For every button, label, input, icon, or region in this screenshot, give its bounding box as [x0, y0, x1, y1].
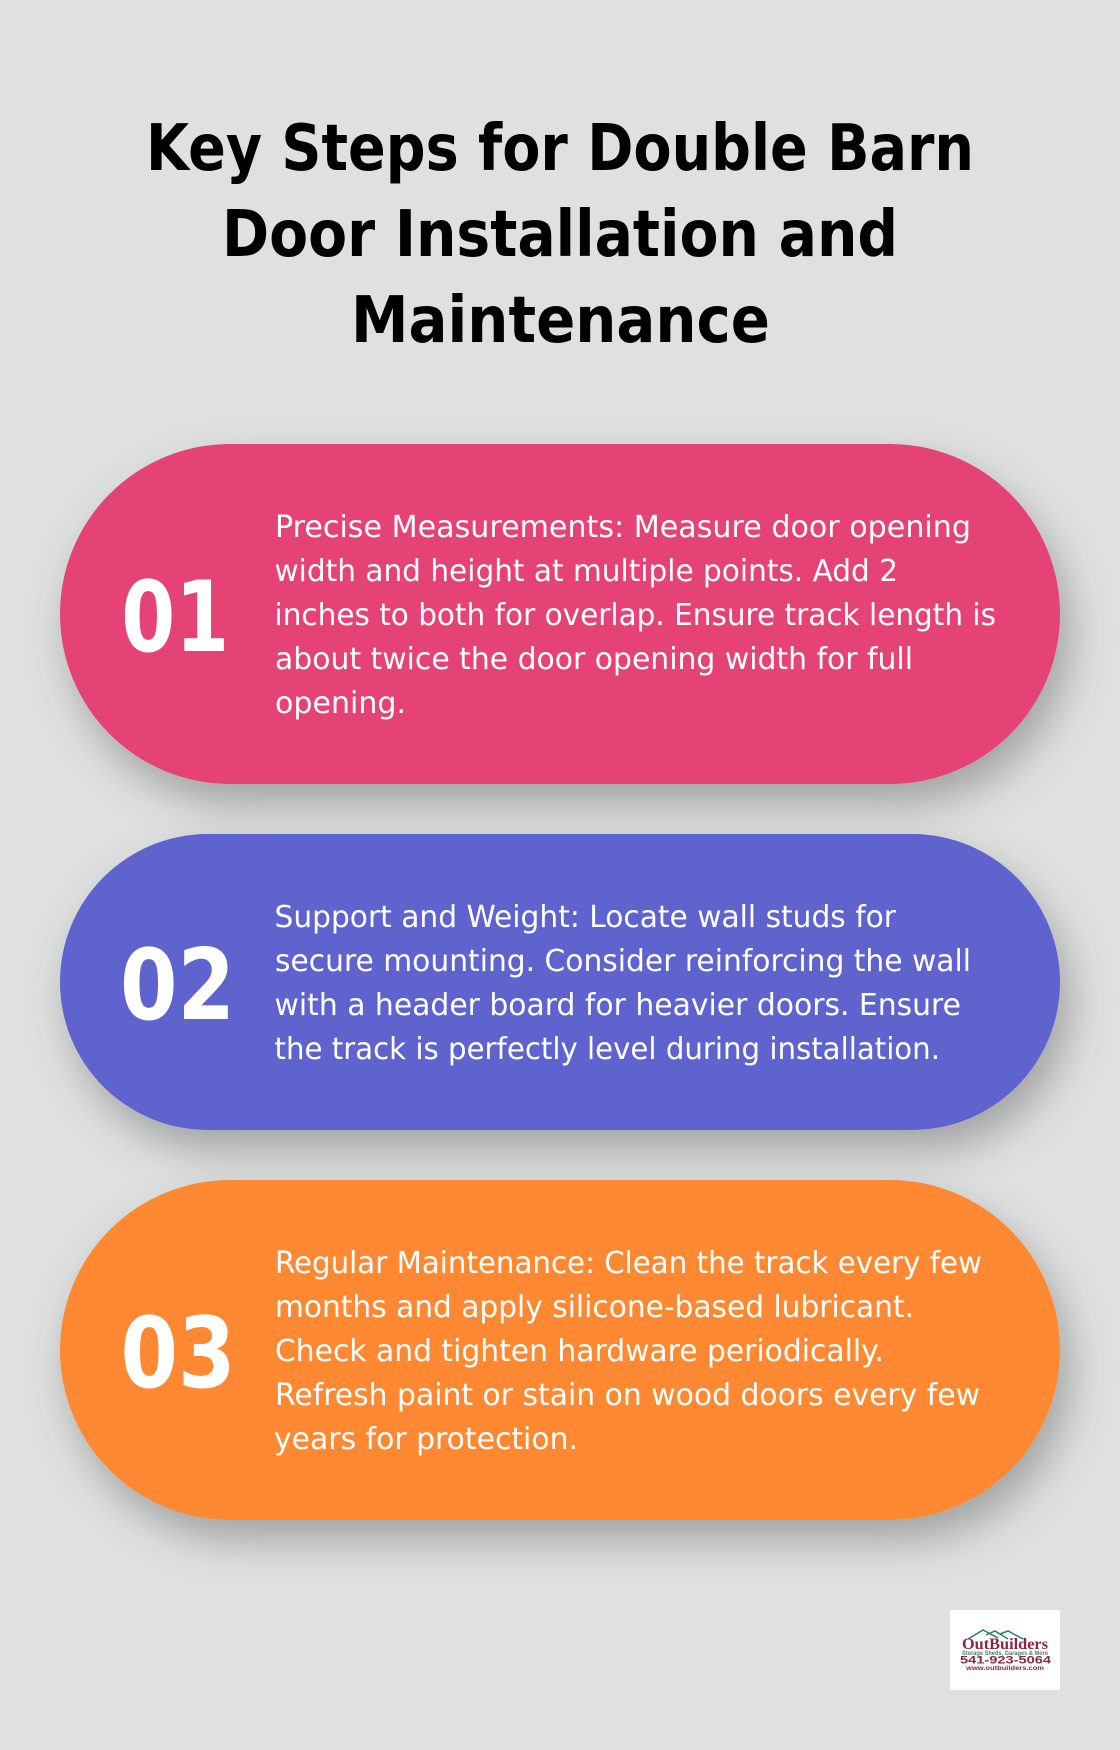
text block 02: with a header board for heavier doors. Ensure — [274, 988, 961, 1023]
number 01: 01 — [121, 561, 229, 675]
title: Maintenance — [351, 284, 770, 358]
pill background 03 — [60, 1180, 1060, 1520]
logo: OutBuilders — [950, 1610, 1060, 1690]
text block 02: Support and Weight: Locate wall studs for — [274, 900, 896, 935]
text block 03: years for protection. — [274, 1422, 578, 1457]
number 02: 02 — [120, 929, 235, 1043]
text block 01: opening. — [275, 686, 406, 721]
panel: step 02 support and weight — [60, 834, 1060, 1130]
text block 03: months and apply silicone-based lubricant. — [275, 1290, 914, 1325]
logo: OutBuilders: www.outbuilders.com — [965, 1665, 1044, 1672]
text block 03: Refresh paint or stain on wood doors every few — [275, 1378, 980, 1413]
text block 03 — [274, 1246, 982, 1457]
text block 03: Check and tighten hardware periodically. — [275, 1334, 884, 1369]
text block 02: secure mounting. Consider reinforcing the wall — [275, 944, 971, 979]
logo: OutBuilders: OutBuilders — [962, 1636, 1048, 1653]
icon: roof lines — [968, 1630, 1023, 1639]
panel: step 01 precise measurements — [60, 444, 1060, 784]
text block 03: Regular Maintenance: Clean the track every few — [275, 1246, 982, 1281]
logo: OutBuilders: 541-923-5064 — [960, 1654, 1052, 1666]
pill background 01 — [60, 444, 1060, 784]
title: Door Installation and — [222, 198, 898, 272]
text block 01 — [274, 510, 996, 721]
text block 01: about twice the door opening width for full — [275, 642, 913, 677]
text block 01: Precise Measurements: Measure door opening — [275, 510, 971, 545]
number 03: 03 — [120, 1297, 236, 1411]
panel: step 03 regular maintenance — [60, 1180, 1060, 1520]
pill background 02 — [60, 834, 1060, 1130]
text block 01: inches to both for overlap. Ensure track length is — [274, 598, 996, 633]
title: Key Steps for Double Barn — [146, 112, 974, 186]
title — [146, 112, 974, 358]
text block 02: the track is perfectly level during installation. — [274, 1032, 940, 1067]
text block 02 — [274, 900, 971, 1067]
logo: OutBuilders: Storage Sheds, Garages & More — [962, 1651, 1049, 1657]
text block 01: width and height at multiple points. Add 2 — [274, 554, 898, 589]
